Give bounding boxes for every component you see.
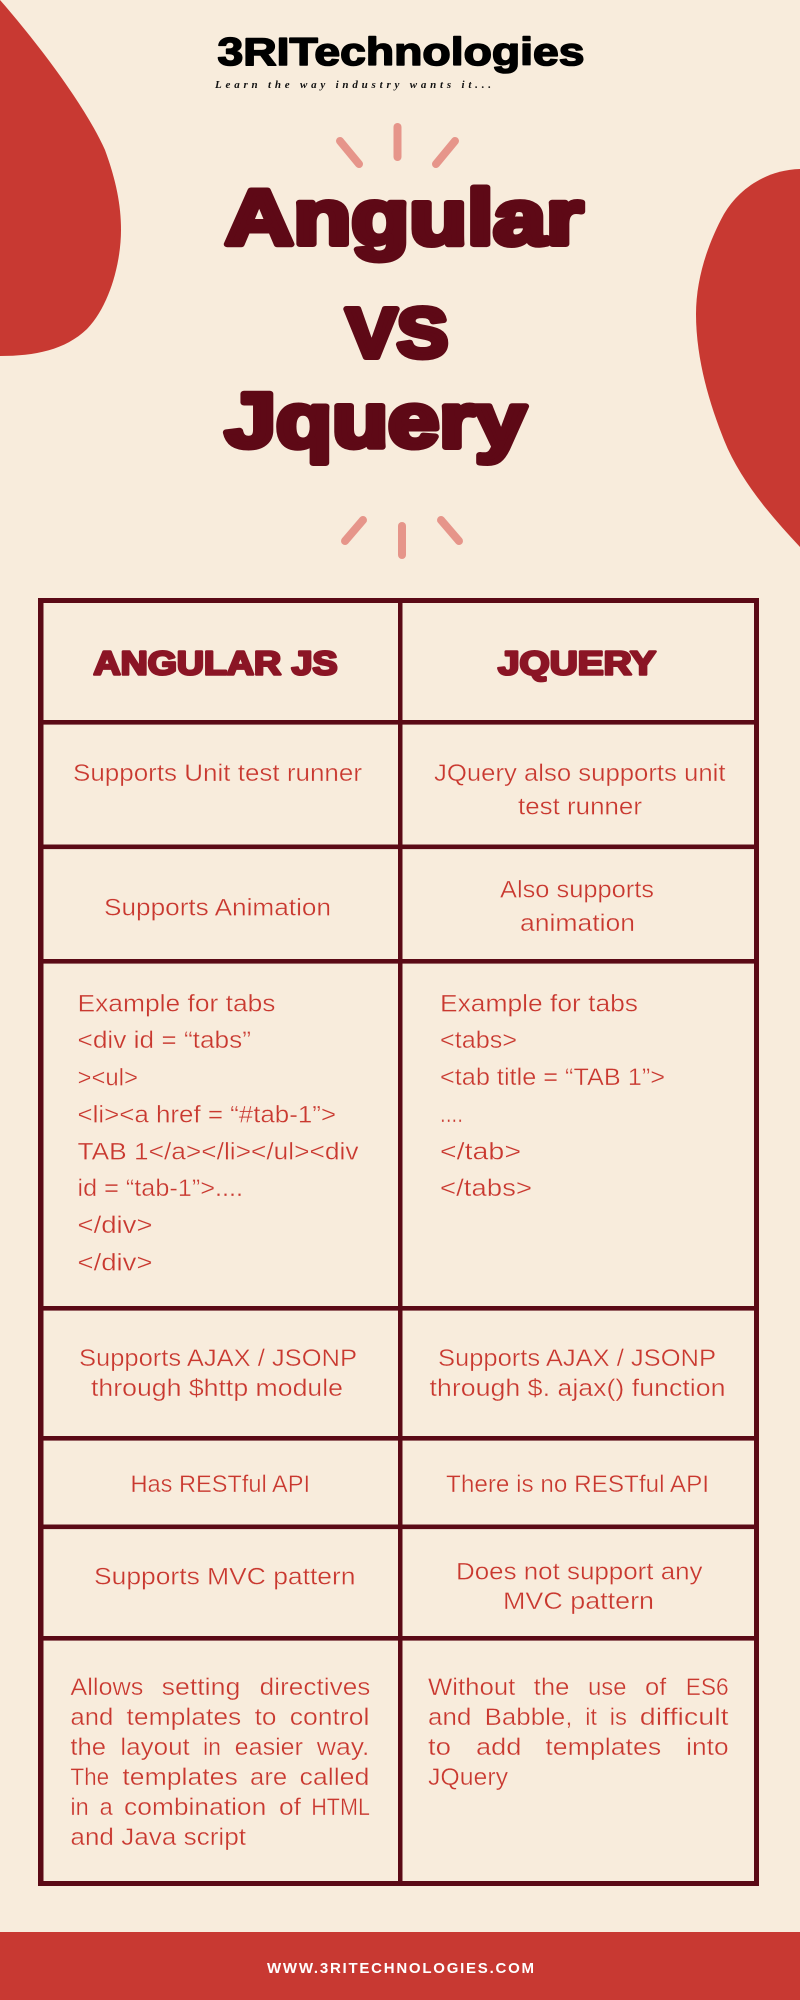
row 7 left: justified paragraph: easier [235, 1734, 303, 1761]
row 3 left: tabs example: TAB 1</a></li></ul><div [78, 1138, 358, 1166]
row 7 right: justified paragraph: add [476, 1734, 521, 1761]
title: jquery: Jquery [225, 378, 526, 464]
row 3 right: tabs example: Example for tabs [440, 990, 638, 1018]
tagline: Learn the way industry wants it... [214, 79, 491, 91]
row 7 left: justified paragraph: The [70, 1764, 109, 1791]
footer url: WWW.3RITECHNOLOGIES.COM [267, 1960, 534, 1977]
footer band [0, 1932, 800, 2000]
row 7 right: justified paragraph: it [585, 1704, 597, 1731]
row 7 right: justified paragraph: use [588, 1674, 626, 1701]
row 7 left: justified paragraph: way. [316, 1734, 369, 1761]
row 7 left: justified paragraph [70, 1674, 370, 1851]
row 7 left: justified paragraph: Allows [70, 1674, 143, 1701]
row 7 left: justified paragraph: setting [162, 1674, 240, 1701]
row 1 right [434, 760, 726, 820]
row 7 left: justified paragraph: in [203, 1734, 221, 1761]
row 7 right: justified paragraph: and [428, 1704, 471, 1731]
row 4 left: through $http module [91, 1375, 343, 1402]
row 7 left: justified paragraph: control [290, 1704, 369, 1731]
row 3 right: tabs example: </tabs> [440, 1175, 532, 1202]
icon: top sparks [340, 127, 455, 164]
row 6 left: Supports MVC pattern [94, 1564, 356, 1590]
row 2 right: animation [520, 910, 635, 937]
row 7 left: justified paragraph: in [70, 1794, 89, 1821]
row 7 right: justified paragraph: the [534, 1674, 569, 1701]
title: vs: VS [346, 294, 448, 372]
row 3 left: tabs example: ><ul> [78, 1064, 138, 1092]
row 3 right: tabs example: <tabs> [440, 1027, 517, 1054]
logo: 3RITechnologies [218, 31, 584, 74]
row 6 right: Does not support any [456, 1558, 702, 1586]
row 7 left: justified paragraph: and Java script [70, 1824, 246, 1851]
main title: Angular [225, 173, 583, 261]
row 4 right: Supports AJAX / JSONP [438, 1345, 716, 1372]
row 5 left: Has RESTful API [130, 1471, 310, 1498]
logo [214, 31, 584, 91]
row 3 left: tabs example [78, 990, 358, 1276]
row 7 left: justified paragraph: and [70, 1704, 113, 1731]
row 3 right: tabs example: .... [440, 1101, 463, 1128]
row 4 right: through $. ajax() function [430, 1375, 726, 1402]
row 2 left: Supports Animation [104, 894, 331, 922]
row 7 right: justified paragraph: Babble, [485, 1704, 572, 1731]
row 7 left: justified paragraph: called [300, 1764, 369, 1791]
row 7 right: justified paragraph: JQuery [428, 1764, 508, 1791]
column heading: angular js: ANGULAR JS [94, 644, 338, 682]
row 2 right [500, 876, 654, 937]
row 1 right: test runner [518, 794, 642, 820]
row 3 right: tabs example: </tab> [440, 1138, 521, 1166]
row 7 left: justified paragraph: of [279, 1794, 301, 1821]
row 7 right: justified paragraph: difficult [640, 1704, 729, 1731]
comparison table grid [38, 598, 759, 1886]
row 3 left: tabs example: </div> [78, 1250, 152, 1276]
row 7 left: justified paragraph: layout [120, 1734, 190, 1761]
row 7 right: justified paragraph [428, 1674, 729, 1791]
row 7 left: justified paragraph: are [250, 1764, 287, 1791]
row 4 left: Supports AJAX / JSONP [79, 1345, 357, 1372]
row 7 left: justified paragraph: to [255, 1704, 276, 1731]
row 7 right: justified paragraph: to [428, 1734, 451, 1761]
row 7 left: justified paragraph: the [70, 1734, 106, 1761]
row 6 right: MVC pattern [503, 1588, 654, 1615]
icon: bottom sparks [345, 520, 459, 555]
row 7 left: justified paragraph: combination [124, 1794, 266, 1821]
row 7 left: justified paragraph: a [100, 1794, 113, 1821]
row 7 right: justified paragraph: is [610, 1704, 627, 1731]
row 3 left: tabs example: </div> [78, 1212, 152, 1239]
row 5 right: There is no RESTful API [446, 1471, 709, 1498]
row 2 right: Also supports [500, 876, 654, 904]
row 3 left: tabs example: <div id = “tabs” [78, 1027, 251, 1054]
row 3 left: tabs example: <li><a href = “#tab-1”> [78, 1102, 336, 1128]
row 7 left: justified paragraph: directives [260, 1674, 370, 1701]
row 3 right: tabs example [440, 990, 665, 1202]
row 7 left: justified paragraph: templates [122, 1764, 238, 1791]
row 3 left: tabs example: Example for tabs [78, 990, 276, 1018]
main title [225, 173, 583, 464]
row 1 right: JQuery also supports unit [434, 760, 726, 787]
row 7 right: justified paragraph: of [645, 1674, 667, 1701]
row 4 left [79, 1345, 357, 1402]
row 7 right: justified paragraph: into [686, 1734, 729, 1761]
row 3 left: tabs example: id = “tab-1”>.... [78, 1175, 243, 1202]
row 7 left: justified paragraph: HTML [311, 1794, 370, 1821]
decorative blob: top left [0, 0, 121, 356]
row 7 right: justified paragraph: Without [428, 1674, 516, 1701]
row 6 right [456, 1558, 702, 1615]
column heading: jquery: JQUERY [498, 644, 656, 682]
row 7 left: justified paragraph: templates [126, 1704, 241, 1731]
row 4 right [430, 1345, 726, 1402]
decorative blob: right [696, 169, 800, 547]
row 3 right: tabs example: <tab title = “TAB 1”> [440, 1064, 665, 1091]
row 1 left: Supports Unit test runner [73, 760, 362, 787]
row 7 right: justified paragraph: templates [545, 1734, 661, 1761]
row 7 right: justified paragraph: ES6 [686, 1674, 729, 1701]
